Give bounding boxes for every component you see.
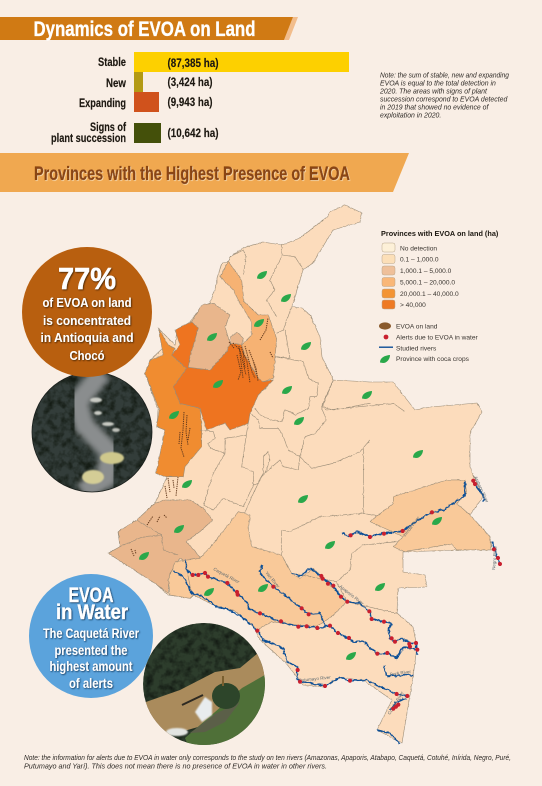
legend <box>379 229 499 363</box>
photo: mining on land <box>32 372 152 492</box>
note: dynamics <box>379 72 509 120</box>
river labels: Caquetá River <box>213 566 241 585</box>
legend: Provinces with EVOA on land (ha) <box>381 229 499 238</box>
alert markers <box>191 479 502 711</box>
river labels: Atabapo River <box>473 475 490 504</box>
banner: Dynamics of EVOA on Land: Dynamics of EVOA on Land <box>34 18 256 41</box>
callout: EVOA in water: presented the <box>54 643 128 658</box>
legend: > 40,000 <box>400 302 426 309</box>
coca crop leaves <box>139 271 442 660</box>
river labels: Apaporis River <box>338 584 365 606</box>
note: dynamics: exploitation in 2020. <box>380 112 441 120</box>
callout: EVOA in water: highest amount <box>50 659 133 674</box>
bar chart: EVOA dynamics <box>51 52 349 145</box>
bar chart: EVOA dynamics: Stable <box>98 55 126 69</box>
bar chart: EVOA dynamics: (3,424 ha) <box>168 75 213 89</box>
callout: EVOA in water: The Caquetá River <box>43 626 140 641</box>
EVOA on land speckles <box>131 318 273 556</box>
bar chart: EVOA dynamics: Expanding <box>79 96 126 110</box>
river labels: Negro River <box>491 545 498 570</box>
note: dynamics: 2020. The areas with signs of plant <box>379 88 488 96</box>
legend: No detection <box>400 246 437 252</box>
province: Choco <box>145 328 202 477</box>
bar chart: EVOA dynamics: New <box>106 76 127 90</box>
river labels: Putumayo River <box>299 675 331 683</box>
callout: EVOA in water: of alerts <box>69 676 113 691</box>
note: water alerts: Putumayo and Yarí). This does not mean there is no presence of EVOA in water in other rivers. <box>24 762 327 770</box>
bar chart: EVOA dynamics: (9,943 ha) <box>168 95 213 109</box>
note: dynamics: EVOA is equal to the total detection in <box>380 80 496 88</box>
callout: 77 percent: of EVOA on land <box>42 295 132 310</box>
river labels: Cotuhé River <box>387 690 405 716</box>
river labels: Puré River <box>389 669 412 677</box>
legend: 20,000.1 – 40,000.0 <box>400 291 459 298</box>
river labels <box>213 475 498 716</box>
legend: Alerts due to EVOA in water <box>396 334 479 342</box>
note: dynamics: in 2019 that showed no evidence of <box>380 104 490 112</box>
legend: 0.1 – 1,000.0 <box>400 256 439 264</box>
legend: Studied rivers <box>396 346 437 352</box>
banner: Provinces with the Highest Presence of EVOA <box>0 153 409 192</box>
province: Antioquia <box>172 322 273 430</box>
note: dynamics: succession correspond to EVOA detected <box>380 96 508 104</box>
banner: Provinces with the Highest Presence of EVOA: Provinces with the Highest Presence of EVOA <box>34 164 350 185</box>
bar chart: EVOA dynamics: (87,385 ha) <box>168 56 218 70</box>
river labels: Yarí River <box>264 570 281 589</box>
icon: alert <box>384 335 388 339</box>
icon: EVOA on land <box>379 322 391 330</box>
province: Guainia <box>370 480 492 552</box>
province: Bolivar <box>220 262 277 382</box>
callout: 77 percent: 77% <box>58 261 116 296</box>
river labels: Inírida River <box>402 515 421 538</box>
icon: leaf <box>380 355 390 363</box>
callout: 77 percent: is concentrated <box>43 313 131 328</box>
callout: EVOA in water: in Water <box>56 601 128 624</box>
rivers <box>173 480 500 744</box>
legend: 1,000.1 – 5,000.0 <box>400 268 452 275</box>
callout: 77 percent: Chocó <box>70 348 105 363</box>
note: water alerts: Note: the information for alerts due to EVOA in water only corresponds to the study on ten rivers (Amazonas, Apaporis, Atabapo, Caquetá, Cotuhé, Inírida, Negro, Puré, <box>24 753 511 762</box>
callout: 77 percent <box>22 247 152 377</box>
bar chart: EVOA dynamics: plant succession <box>51 131 126 145</box>
map of Colombia <box>108 205 502 744</box>
legend: 5,000.1 – 20,000.0 <box>400 280 455 286</box>
provinces <box>108 205 492 743</box>
note: dynamics: Note: the sum of stable, new and expanding <box>380 72 509 80</box>
legend: Province with coca crops <box>396 356 470 363</box>
boundaries: central <box>200 357 370 520</box>
photo: river dredging <box>143 623 270 750</box>
province: Cordoba <box>188 303 230 370</box>
callout: EVOA in water <box>29 574 153 698</box>
bar chart: EVOA dynamics: (10,642 ha) <box>168 126 218 140</box>
icon: river <box>379 346 393 348</box>
legend: EVOA on land <box>396 324 438 330</box>
bar chart: EVOA dynamics: Signs of <box>90 120 127 134</box>
callout: 77 percent: in Antioquia and <box>40 330 134 345</box>
boundaries: north <box>230 245 303 358</box>
note: water alerts <box>24 753 511 770</box>
province: Narino and Cauca <box>108 500 213 593</box>
province: Caqueta and Putumayo <box>168 512 347 630</box>
callout: EVOA in water: EVOA <box>68 584 114 607</box>
